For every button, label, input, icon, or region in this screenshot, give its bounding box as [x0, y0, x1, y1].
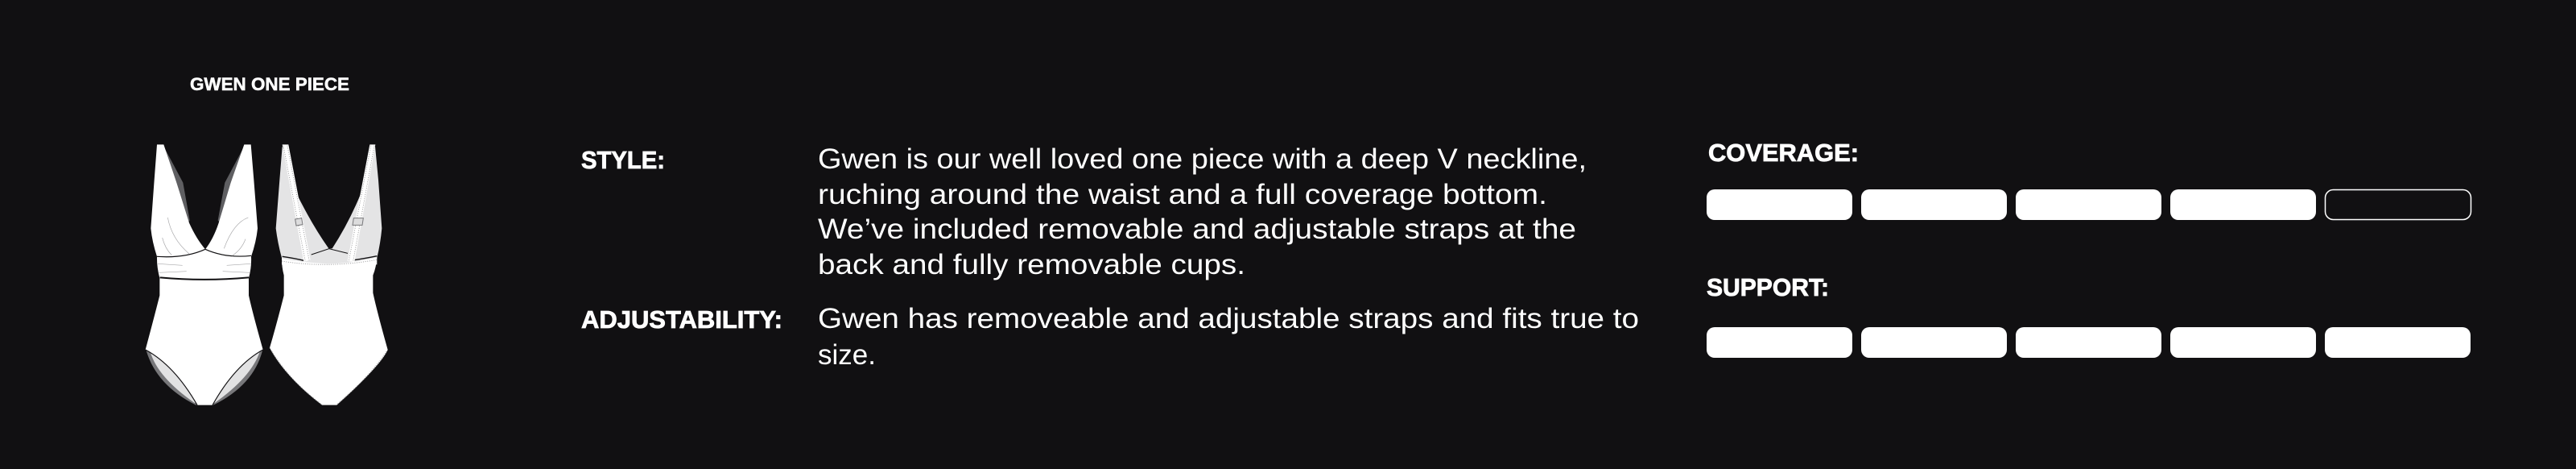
- panel: support rating: [1707, 273, 2471, 358]
- panel: style description: [581, 143, 1587, 280]
- heading: product name: GWEN ONE PIECE: [190, 74, 349, 94]
- panel: product illustration: [146, 74, 388, 405]
- label: coverage: COVERAGE:: [1708, 139, 1859, 167]
- text block: style body: ruching around the waist and a full coverage bottom.: [818, 179, 1547, 210]
- text block: style body: back and fully removable cups.: [818, 249, 1245, 280]
- bar chart: coverage 4 of 5: [1707, 189, 2471, 220]
- text block: style body: Gwen is our well loved one piece with a deep V neckline,: [818, 143, 1587, 175]
- text block: adjustability body: [818, 303, 1639, 371]
- label: style: STYLE:: [581, 146, 665, 174]
- icon: swimsuit front view: [146, 144, 263, 405]
- label: adjustability: ADJUSTABILITY:: [581, 305, 782, 334]
- bar chart: support 5 of 5: [1707, 327, 2471, 358]
- text block: style body: We’ve included removable and adjustable straps at the: [818, 214, 1576, 245]
- text block: adjustability body: Gwen has removeable and adjustable straps and fits true to: [818, 303, 1639, 334]
- panel: adjustability description: [581, 303, 1639, 371]
- text block: style body: [818, 143, 1587, 280]
- panel: coverage rating: [1707, 139, 2471, 220]
- text block: adjustability body: size.: [818, 339, 876, 371]
- label: support: SUPPORT:: [1707, 273, 1829, 301]
- icon: swimsuit back view: [270, 144, 388, 405]
